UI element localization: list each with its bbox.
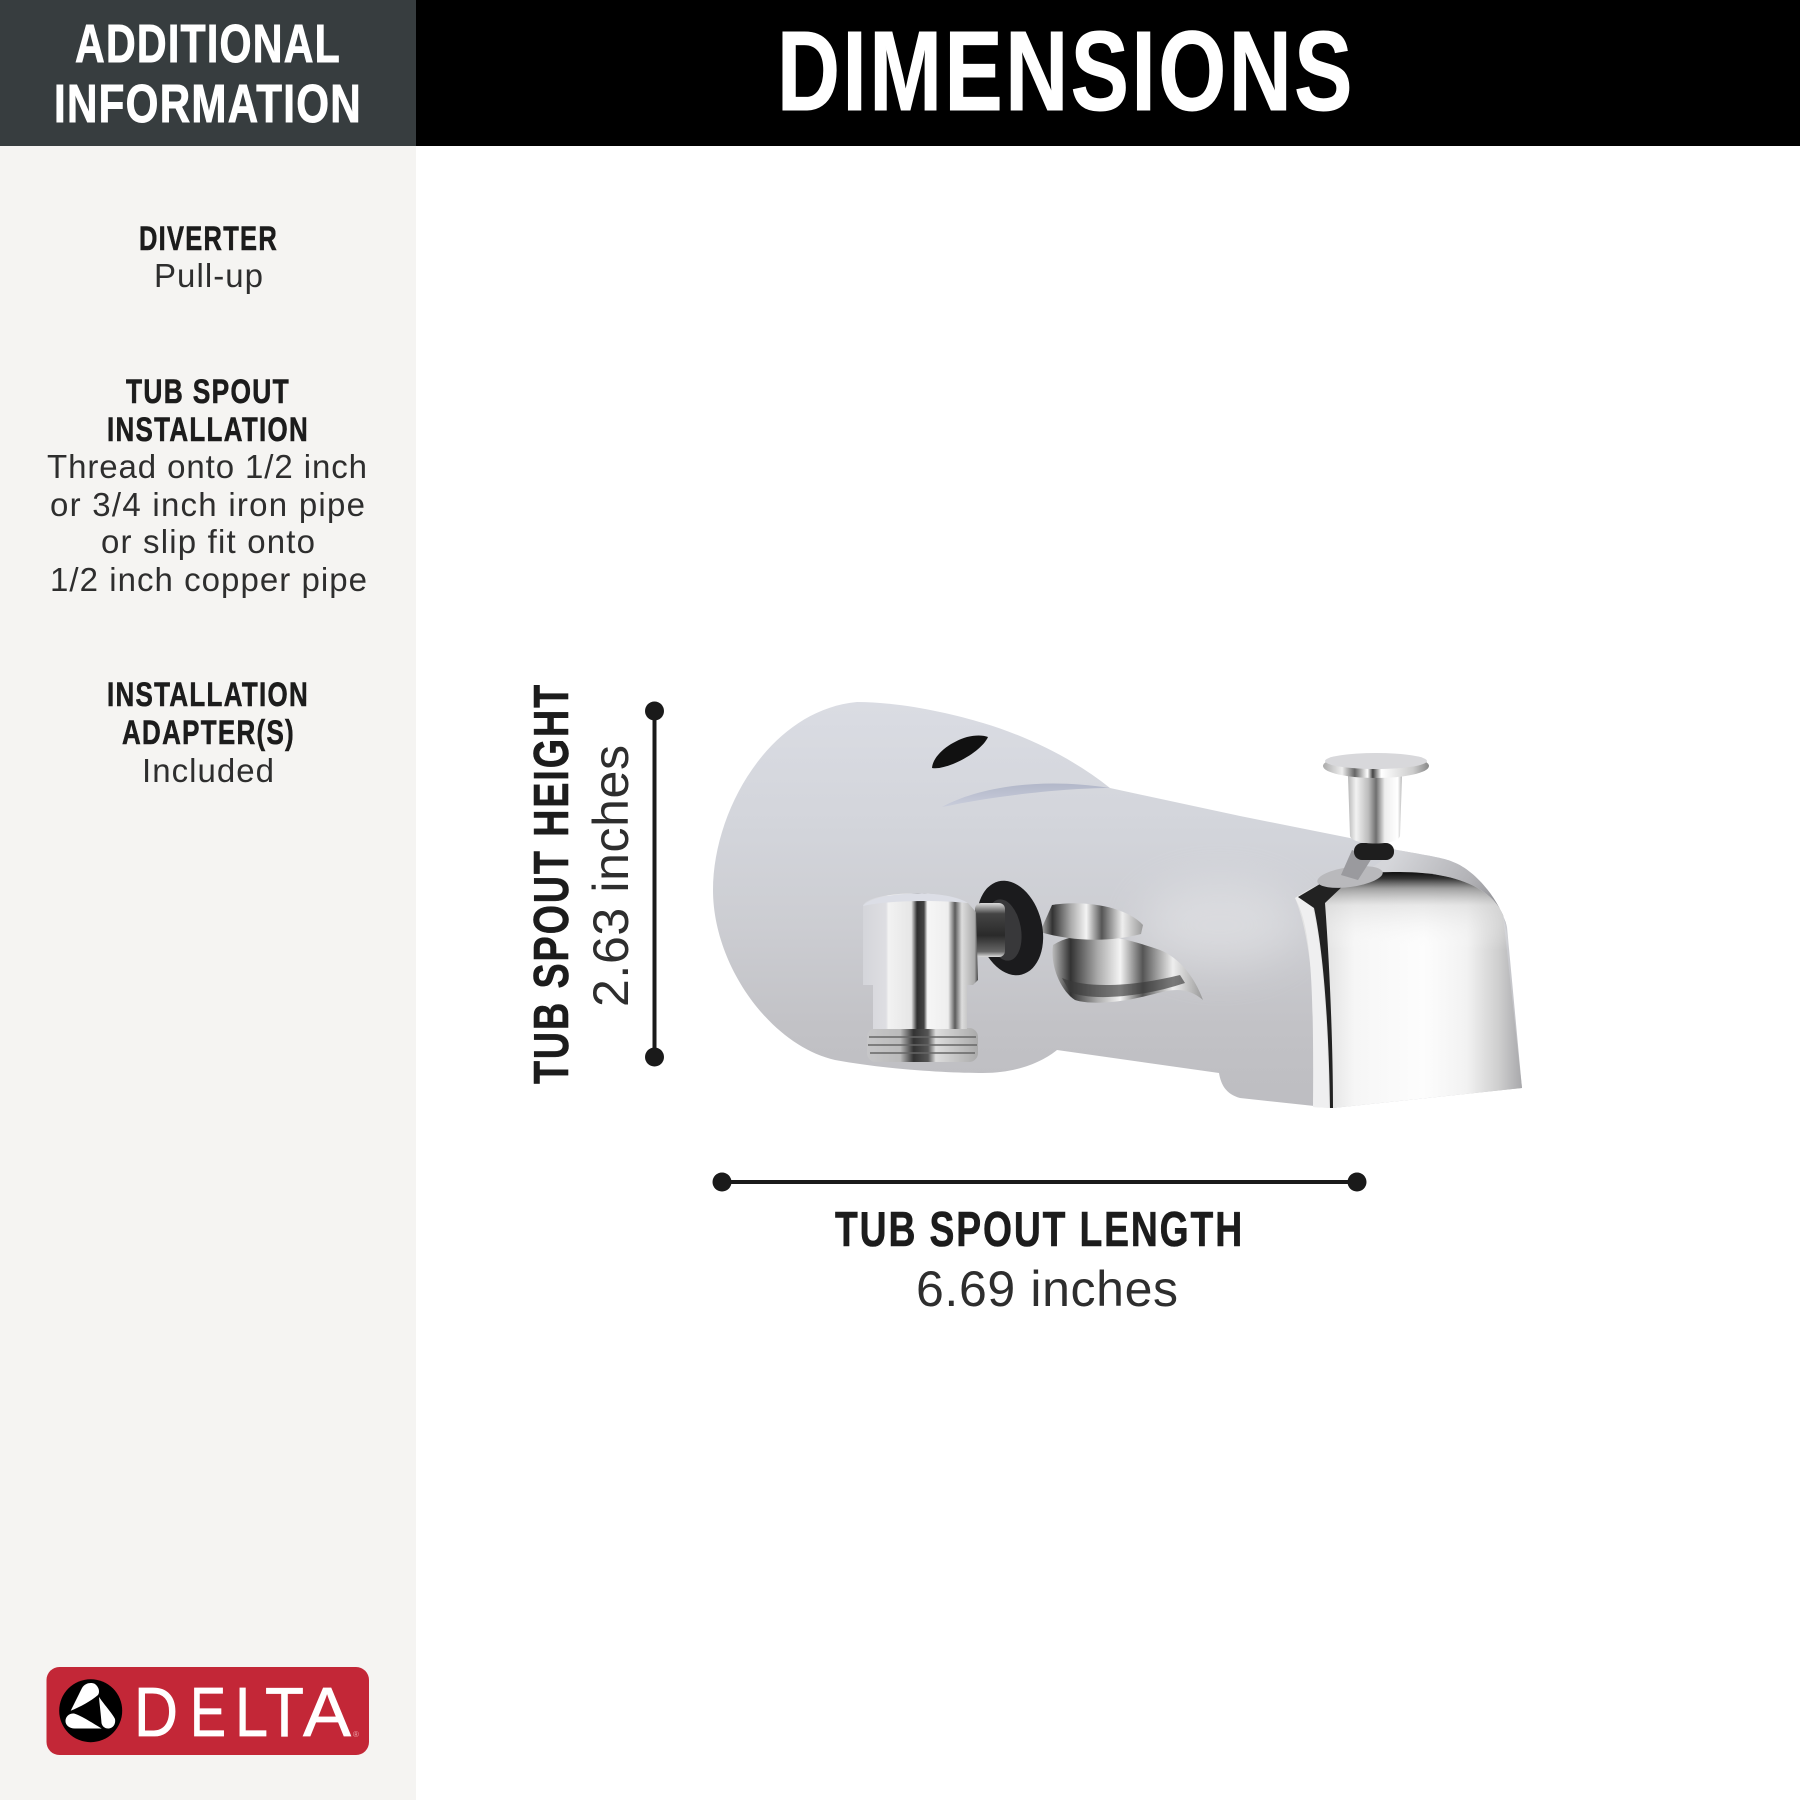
spout body [713,702,1522,1108]
text block: tub spout installation: TUB SPOUT [126,373,290,411]
header: additional information [0,0,416,146]
text block: installation adapters: INSTALLATION [107,676,309,714]
header: additional information: INFORMATION [54,74,362,134]
wordmark: DELTA: L [235,1673,268,1751]
groove highlight [942,784,1110,807]
wordmark: DELTA: ® [353,1730,359,1739]
text block: tub spout installation: or slip fit onto [101,523,315,560]
text block: tub spout installation: or 3/4 inch iron pipe [50,486,365,523]
header: dimensions [416,0,1800,146]
text block: diverter: DIVERTER [139,220,278,258]
header: additional information: ADDITIONAL [75,14,341,74]
text block: diverter [139,220,278,294]
label: tub spout length: TUB SPOUT LENGTH [835,1203,1244,1257]
wordmark: DELTA: E [190,1673,226,1751]
arrow: height dimension line [645,702,664,1066]
text block: installation adapters: ADAPTER(S) [122,714,295,752]
icon: delta triangle mark [59,1679,122,1742]
rubber washer [967,874,1053,982]
text block: diverter: Pull-up [154,257,263,294]
label: tub spout height: TUB SPOUT HEIGHT [525,683,579,1084]
wall connector [863,893,978,1062]
wordmark: DELTA: D [134,1673,178,1751]
wordmark: DELTA [134,1673,359,1751]
water outlet nozzle [1052,935,1203,1003]
text block: installation adapters: Included [142,752,274,789]
label: tub spout length: 6.69 inches [916,1261,1178,1317]
text block: tub spout installation: 1/2 inch copper pipe [50,561,367,598]
text block: tub spout installation: INSTALLATION [107,411,309,449]
panel: sidebar background [0,146,416,1800]
pull-up knob [1316,753,1429,891]
product: tub spout [713,702,1522,1108]
wordmark: DELTA: A [303,1673,351,1751]
label: tub spout length [835,1203,1244,1317]
front face [1295,872,1522,1108]
screw hole [932,736,988,768]
hand shower holder [1040,903,1143,940]
text block: tub spout installation: Thread onto 1/2 inch [47,448,367,485]
label: tub spout height [525,683,639,1084]
logo: delta [46,1667,369,1755]
upper surface near spout tip [1360,850,1507,927]
text block: tub spout installation [47,373,367,598]
spout arm soft highlight [1140,883,1300,967]
label: tub spout height: 2.63 inches [583,745,639,1007]
wordmark: DELTA: T [265,1673,304,1751]
header: dimensions: DIMENSIONS [777,8,1355,134]
arrow: length dimension line [712,1172,1366,1192]
text block: installation adapters [107,676,309,789]
